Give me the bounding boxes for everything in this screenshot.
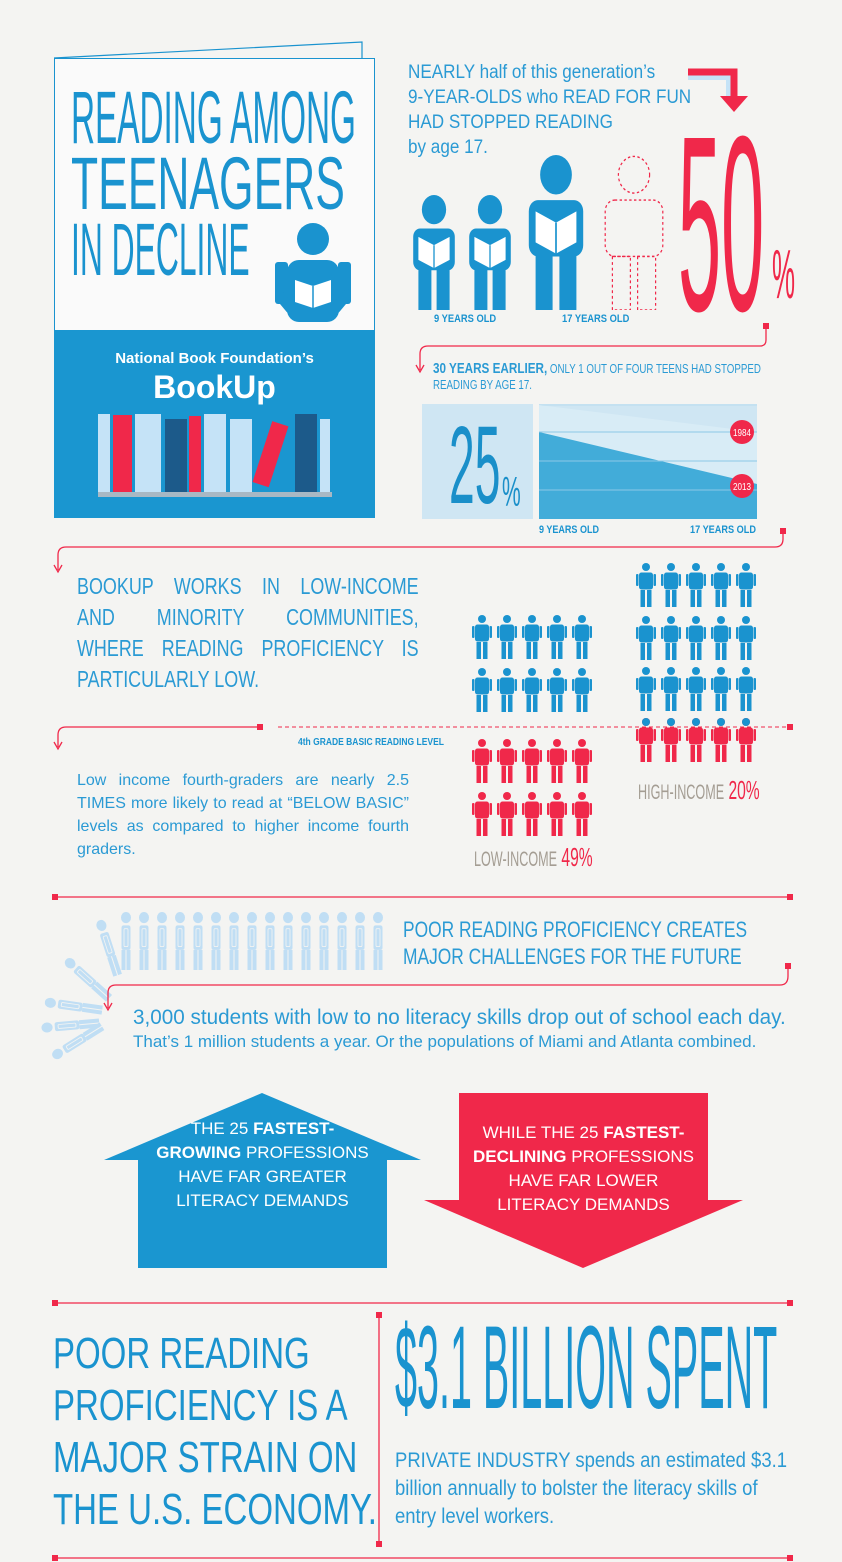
icons: readers 9 and 17: 9 YEARS OLD	[434, 313, 496, 325]
icon: bookshelf	[98, 414, 332, 497]
text: bookup works	[77, 573, 419, 692]
label: low-income 49%: LOW-INCOME 49%	[474, 842, 593, 872]
chart: low-income pictogram	[472, 615, 592, 836]
panel: book cover	[54, 41, 375, 518]
text: private industry: entry level workers.	[395, 1505, 554, 1528]
label: high-income 20%: HIGH-INCOME 20%	[638, 775, 760, 805]
brand	[115, 350, 314, 405]
stat: 25%	[422, 404, 533, 519]
label: basic reading level: 4th GRADE BASIC READING LEVEL	[298, 737, 444, 748]
text: private industry	[395, 1449, 787, 1528]
arrow: up fastest-growing: LITERACY DEMANDS	[176, 1191, 349, 1210]
stat: 50%: %	[772, 235, 795, 313]
text: 30 years earlier	[433, 360, 761, 392]
heading: poor reading proficiency creates	[403, 917, 747, 969]
text: private industry: billion annually to bolster the literacy skills of	[395, 1477, 758, 1500]
chart: area 1984 vs 2013: 9 YEARS OLD	[539, 524, 599, 536]
text: 30 years earlier: 30 YEARS EARLIER, ONLY 1 OUT OF FOUR TEENS HAD STOPPED	[433, 360, 761, 377]
arrow: down fastest-declining: LITERACY DEMANDS	[497, 1195, 670, 1214]
heading: economy strain	[53, 1329, 377, 1534]
heading: economy strain: THE U.S. ECONOMY.	[53, 1485, 377, 1534]
chart: area 1984 vs 2013: 1984	[733, 428, 751, 439]
icons: readers 9 and 17: 17 YEARS OLD	[562, 313, 629, 325]
text: bookup works: WHERE READING PROFICIENCY IS	[77, 635, 419, 661]
arrow: top right	[688, 68, 748, 112]
title: TEENAGERS	[71, 142, 345, 225]
text: nearly half: 9-YEAR-OLDS who READ FOR FUN	[408, 87, 691, 108]
connector arrow 3	[104, 963, 791, 1012]
connector arrow 1	[416, 323, 769, 374]
text: low income paragraph: Low income fourth-graders are nearly 2.5 TIMES more likely to read at “BELOW BASIC” levels as compared to higher income fourth graders.	[77, 772, 409, 858]
heading: economy strain: MAJOR STRAIN ON	[53, 1433, 357, 1482]
text: 3000 students: That’s 1 million students a year. Or the populations of Miami and Atlanta combined.	[133, 1032, 756, 1051]
arrow: up fastest-growing: HAVE FAR GREATER	[178, 1167, 347, 1186]
text: 3000 students	[133, 1006, 786, 1051]
title: IN DECLINE	[71, 208, 250, 291]
text: bookup works: AND MINORITY COMMUNITIES,	[77, 604, 419, 630]
chart: area 1984 vs 2013	[539, 404, 757, 536]
heading: economy strain: POOR READING	[53, 1329, 310, 1378]
stat: 50%: 50	[678, 84, 764, 363]
stat: 25%: 25	[449, 404, 500, 527]
title: READING AMONG	[71, 76, 356, 159]
divider	[52, 1300, 793, 1306]
text: 3000 students: 3,000 students with low to no literacy skills drop out of school each day.	[133, 1006, 786, 1029]
brand: BookUp	[153, 369, 276, 405]
icons: dropping out students	[42, 912, 383, 1060]
icon: seated reader	[275, 223, 351, 322]
text: nearly half: NEARLY half of this generation’s	[408, 62, 655, 83]
arrow: up fastest-growing: GROWING PROFESSIONS	[156, 1143, 369, 1162]
divider	[52, 894, 793, 900]
text: bookup works: PARTICULARLY LOW.	[77, 666, 259, 692]
arrow: up fastest-growing: THE 25 FASTEST-	[191, 1119, 334, 1138]
text: nearly half: HAD STOPPED READING	[408, 112, 613, 133]
stat: 25%: %	[502, 468, 521, 515]
brand: National Book Foundation’s	[115, 350, 314, 367]
text: nearly half	[408, 62, 691, 158]
heading: poor reading proficiency creates: MAJOR CHALLENGES FOR THE FUTURE	[403, 944, 742, 969]
chart: area 1984 vs 2013: 2013	[733, 482, 751, 493]
arrow: down fastest-declining	[424, 1093, 743, 1268]
arrow: down fastest-declining: WHILE THE 25 FASTEST-	[483, 1123, 684, 1142]
text: nearly half: by age 17.	[408, 137, 488, 158]
arrow: down fastest-declining: HAVE FAR LOWER	[509, 1171, 658, 1190]
text: bookup works: BOOKUP WORKS IN LOW-INCOME	[77, 573, 419, 599]
arrow: up fastest-growing	[104, 1093, 421, 1268]
divider bottom	[52, 1555, 793, 1561]
text: private industry: PRIVATE INDUSTRY spends an estimated $3.1	[395, 1449, 787, 1472]
reading level line	[54, 724, 793, 750]
heading: poor reading proficiency creates: POOR READING PROFICIENCY CREATES	[403, 917, 747, 942]
chart: high-income pictogram	[636, 563, 756, 762]
heading: economy strain: PROFICIENCY IS A	[53, 1381, 348, 1430]
stat: $3.1 billion: $3.1 BILLION SPENT	[395, 1302, 777, 1434]
icons: readers 9 and 17	[413, 155, 664, 325]
text: 30 years earlier: READING BY AGE 17.	[433, 378, 532, 392]
connector arrow 2	[54, 528, 786, 574]
vertical divider	[376, 1312, 382, 1547]
arrow: down fastest-declining: DECLINING PROFESSIONS	[473, 1147, 694, 1166]
title	[71, 76, 356, 291]
